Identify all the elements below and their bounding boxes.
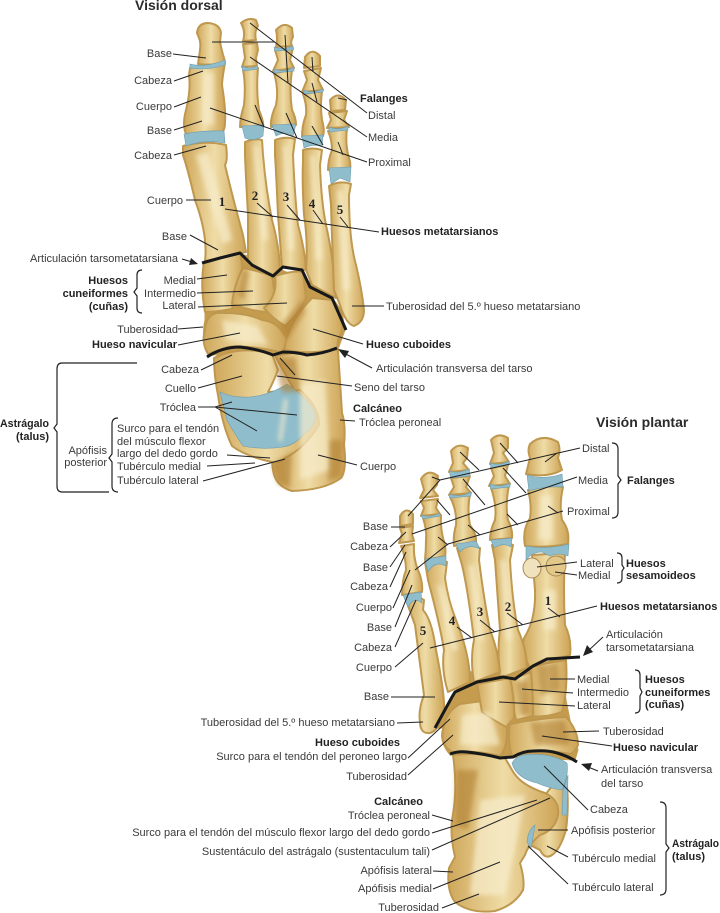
labels: plantar left: Tuberosidad xyxy=(346,771,407,783)
number labels: dorsal metatarsals: 4 xyxy=(309,196,316,211)
number labels: plantar metatarsals: 1 xyxy=(545,593,551,608)
labels: apófisis posterior parts xyxy=(117,423,219,487)
label: Huesos cuneiformes (cuñas), plantar: (cuñas) xyxy=(645,699,684,711)
labels: plantar left: Base xyxy=(363,562,388,574)
cartilage: plantar joints xyxy=(403,461,569,848)
labels: dorsal right: Articulación transversa del tarso xyxy=(376,363,533,375)
labels: dorsal right: Falanges xyxy=(360,93,408,105)
labels: plantar right: Medial xyxy=(578,570,610,582)
labels: plantar right xyxy=(567,443,717,894)
labels: dorsal left: Tróclea xyxy=(160,402,197,414)
arrow: to transverse tarsal joint, dorsal xyxy=(338,349,372,368)
labels: dorsal left: Articulación tarsometatarsiana xyxy=(30,253,179,265)
labels: plantar left: Base xyxy=(367,622,392,634)
labels: apófisis posterior parts: Tubérculo medial xyxy=(117,461,201,473)
labels: dorsal left: Cuerpo xyxy=(147,195,183,207)
bones: dorsal metatarsals xyxy=(183,138,364,326)
panel: dorsal view of the foot xyxy=(0,0,580,492)
cartilage: dorsal joints xyxy=(184,46,351,448)
bones: plantar metatarsals xyxy=(406,543,570,733)
bracket: Huesos sesamoideos xyxy=(617,553,624,583)
labels: plantar left: Calcáneo xyxy=(374,796,423,808)
labels: dorsal left: Intermedio xyxy=(144,288,196,300)
number labels: dorsal metatarsals: 1 xyxy=(219,194,225,209)
labels: plantar left: Cuerpo xyxy=(356,662,392,674)
leader lines: dorsal left xyxy=(173,54,297,481)
labels: plantar right: Medial xyxy=(577,674,609,686)
backing: dorsal tarsal silhouette xyxy=(204,255,345,355)
arrow: to tarsometatarsal joint, dorsal xyxy=(182,258,198,265)
labels: dorsal left: Cuello xyxy=(165,383,196,395)
joint line: tarsometatarsal, plantar xyxy=(435,657,580,728)
labels: plantar right: Media xyxy=(578,475,609,487)
labels: plantar left: Cabeza xyxy=(354,642,393,654)
labels: dorsal left: Tuberosidad xyxy=(117,324,178,336)
labels: dorsal right: Proximal xyxy=(368,157,411,169)
labels: plantar left xyxy=(132,521,439,913)
labels: dorsal right: Cuerpo xyxy=(360,461,396,473)
labels: dorsal right: Distal xyxy=(368,110,396,122)
labels: dorsal left: Base xyxy=(147,48,172,60)
panel: plantar view of the foot xyxy=(132,414,719,913)
arrow: to tarsometatarsal joint, plantar xyxy=(583,637,603,656)
leader lines: plantar phalanges and metatarsals xyxy=(408,443,597,648)
label: Astrágalo (talus), plantar: (talus) xyxy=(672,851,705,863)
labels: apófisis posterior parts: Tubérculo lateral xyxy=(117,475,199,487)
labels: dorsal left: Base xyxy=(147,125,172,137)
arrow: to transverse tarsal joint, plantar xyxy=(581,763,598,771)
labels: apófisis posterior parts: largo del dedo gordo xyxy=(117,448,218,460)
number labels: dorsal metatarsals: 5 xyxy=(337,202,344,217)
labels: dorsal right xyxy=(353,93,580,473)
labels: dorsal left: Cabeza xyxy=(161,364,200,376)
number labels: plantar metatarsals xyxy=(420,593,551,638)
bones: dorsal hindfoot xyxy=(204,298,345,491)
label: Huesos cuneiformes (cuñas), dorsal: (cuñas) xyxy=(89,301,128,313)
labels: plantar left: Base xyxy=(363,521,388,533)
labels: plantar left: Tuberosidad del 5.º hueso metatarsiano xyxy=(201,717,395,729)
labels: dorsal left: Medial xyxy=(164,275,196,287)
labels: plantar left: Cabeza xyxy=(350,581,389,593)
bones: sesamoids xyxy=(523,556,566,578)
labels: dorsal right: Seno del tarso xyxy=(354,382,425,394)
labels: plantar right: Tubérculo medial xyxy=(572,853,656,865)
labels: dorsal left: Cabeza xyxy=(134,75,173,87)
labels: plantar right: Cabeza xyxy=(590,804,629,816)
bracket: Huesos cuneiformes, plantar xyxy=(635,670,642,713)
illustration: plantar foot bones xyxy=(399,435,578,912)
labels: dorsal right: Huesos metatarsianos xyxy=(381,226,498,238)
labels: apófisis posterior parts: del músculo flexor xyxy=(117,436,206,448)
labels: plantar right: Distal xyxy=(582,443,610,455)
leader lines: dorsal phalanges and metatarsals xyxy=(210,23,384,465)
labels: plantar left: Hueso cuboides xyxy=(315,737,400,749)
number labels: dorsal metatarsals xyxy=(219,188,344,217)
bones: plantar phalanges, toes two to five xyxy=(399,435,512,595)
label: Astrágalo (talus), plantar xyxy=(672,838,719,863)
labels: plantar right: del tarso xyxy=(601,778,643,790)
label: Huesos sesamoideos: sesamoideos xyxy=(626,570,696,582)
bracket: Falanges, plantar xyxy=(612,443,621,518)
labels: plantar right: Hueso navicular xyxy=(613,742,699,754)
labels: plantar right: Articulación transversa xyxy=(601,764,713,776)
labels: plantar left: Cuerpo xyxy=(356,602,392,614)
labels: plantar right: Lateral xyxy=(577,700,611,712)
label: Astrágalo (talus), dorsal xyxy=(0,418,49,443)
joint line: tarsometatarsal, dorsal xyxy=(202,253,346,330)
illustration: dorsal foot bones xyxy=(183,19,364,491)
label: Huesos cuneiformes (cuñas), dorsal: cuneiformes xyxy=(63,288,128,300)
number labels: plantar metatarsals: 2 xyxy=(505,599,511,614)
labels: plantar right: Proximal xyxy=(567,506,610,518)
label: Astrágalo (talus), dorsal: (talus) xyxy=(16,431,49,443)
highlights and shadows: plantar xyxy=(437,495,556,895)
bracket: Astrágalo, dorsal xyxy=(54,363,137,492)
leader lines: plantar right xyxy=(499,679,612,884)
labels: dorsal left: Cuerpo xyxy=(136,101,172,113)
number labels: dorsal metatarsals: 3 xyxy=(283,189,290,204)
labels: dorsal left: Lateral xyxy=(162,300,196,312)
label: Apófisis posterior: posterior xyxy=(64,457,107,469)
label: Huesos cuneiformes (cuñas), plantar: cuneiformes xyxy=(645,687,710,699)
labels: plantar left: Apófisis medial xyxy=(358,883,432,895)
labels: plantar right: Lateral xyxy=(580,558,614,570)
bones: plantar cuneiforms xyxy=(477,660,566,727)
labels: dorsal left: Base xyxy=(162,231,187,243)
joint line: transverse tarsal, plantar xyxy=(450,751,577,762)
label: Apófisis posterior: Apófisis xyxy=(68,445,107,457)
labels: plantar right: Tubérculo lateral xyxy=(572,882,654,894)
labels: plantar left: Tróclea peroneal xyxy=(348,810,430,822)
labels: plantar right: Falanges xyxy=(627,475,675,487)
labels: plantar right: Apófisis posterior xyxy=(571,825,656,837)
labels: dorsal left: Hueso navicular xyxy=(92,339,178,351)
labels: dorsal right: Tróclea peroneal xyxy=(359,417,441,429)
labels: plantar left: Cabeza xyxy=(350,541,389,553)
labels: plantar right: Huesos metatarsianos xyxy=(600,601,717,613)
labels: plantar left: Surco para el tendón del músculo flexor largo del dedo gordo xyxy=(132,827,430,839)
bones: dorsal cuneiforms xyxy=(202,253,306,326)
bracket: Apófisis posterior xyxy=(109,418,118,492)
labels: plantar right: Tuberosidad xyxy=(603,726,664,738)
bones: dorsal phalanges, toes two to five xyxy=(240,19,350,170)
number labels: dorsal metatarsals: 2 xyxy=(252,188,258,203)
label: Huesos sesamoideos: Huesos xyxy=(626,558,666,570)
labels: plantar left: Sustentáculo del astrágalo (sustentaculum tali) xyxy=(202,846,430,858)
label: Huesos cuneiformes (cuñas), dorsal: Huesos xyxy=(88,275,128,287)
bracket: Astrágalo, plantar xyxy=(660,802,669,895)
bones: plantar phalanges, big toe xyxy=(524,438,568,547)
label: Astrágalo (talus), dorsal: Astrágalo xyxy=(0,418,49,430)
bones: dorsal phalanges, big toe xyxy=(184,23,225,134)
leader lines: plantar left xyxy=(390,527,550,908)
labels: dorsal right: Calcáneo xyxy=(353,403,402,415)
highlights and shadows: dorsal xyxy=(196,72,350,480)
labels: dorsal right: Tuberosidad del 5.º hueso metatarsiano xyxy=(386,301,580,313)
labels: plantar left: Surco para el tendón del peroneo largo xyxy=(216,751,407,763)
number labels: plantar metatarsals: 4 xyxy=(449,613,456,628)
label: Huesos cuneiformes (cuñas), plantar: Huesos xyxy=(645,674,685,686)
labels: apófisis posterior parts: Surco para el tendón xyxy=(117,423,219,435)
labels: dorsal right: Media xyxy=(368,132,399,144)
labels: plantar left: Base xyxy=(364,691,389,703)
heading: Visión plantar: Visión plantar xyxy=(596,414,689,430)
labels: plantar right: tarsometatarsiana xyxy=(606,642,695,654)
backing: plantar tarsal silhouette xyxy=(435,655,578,760)
labels: plantar right: Articulación xyxy=(606,629,663,641)
bracket: Huesos cuneiformes, dorsal xyxy=(134,270,142,313)
labels: dorsal left xyxy=(30,48,200,414)
bones: plantar hindfoot xyxy=(442,700,578,912)
labels: plantar right: Intermedio xyxy=(577,687,629,699)
number labels: plantar metatarsals: 5 xyxy=(420,623,427,638)
labels: dorsal left: Cabeza xyxy=(134,150,173,162)
number labels: plantar metatarsals: 3 xyxy=(477,604,484,619)
joint line: transverse tarsal, dorsal xyxy=(207,347,337,357)
labels: plantar left: Apófisis lateral xyxy=(360,865,432,877)
labels: dorsal right: Hueso cuboides xyxy=(366,339,451,351)
